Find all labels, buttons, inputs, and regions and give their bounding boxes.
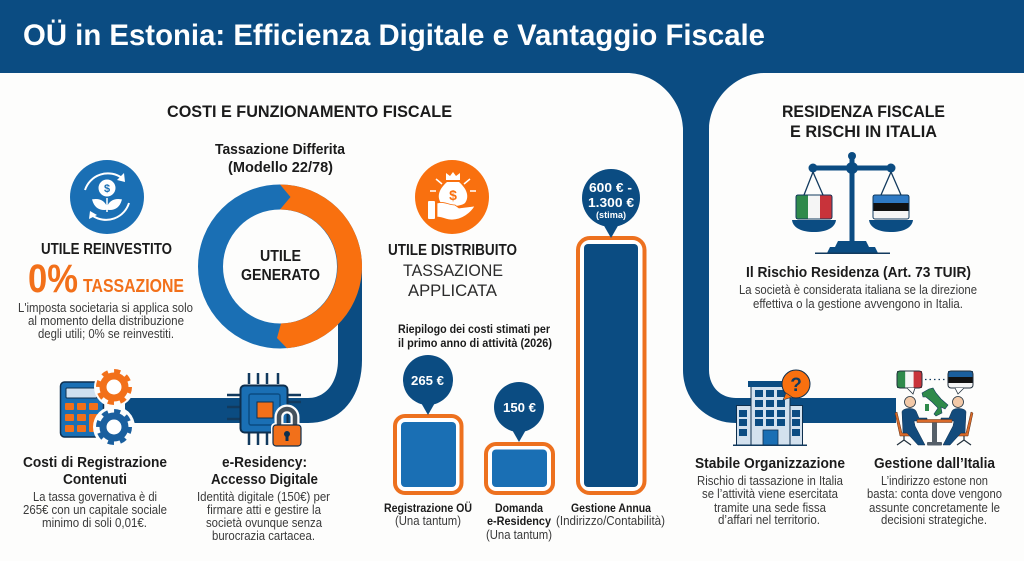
bar: domanda e-residency: e-Residency <box>487 514 551 528</box>
donut title: (Modello 22/78) <box>228 160 333 176</box>
bar: gestione annua: Gestione Annua <box>571 501 651 515</box>
text block: costi di registrazione <box>23 455 167 530</box>
text block: gestione dall'italia <box>867 456 1002 527</box>
donut blue segment <box>210 197 350 336</box>
text block: e-residency: Identità digitale (150€) per <box>197 490 330 504</box>
bar: registrazione OÜ: Registrazione OÜ <box>384 500 472 515</box>
text block: costi di registrazione: minimo di soli 0,01€. <box>42 516 147 530</box>
bar chart caption: il primo anno di attività (2026) <box>398 336 552 350</box>
icon: meeting between Italy and Estonia <box>895 371 973 446</box>
bar: domanda e-residency: (Una tantum) <box>486 528 552 542</box>
donut title <box>215 142 346 176</box>
text block: il rischio residenza: effettiva o la gestione avvengono in Italia. <box>753 297 963 311</box>
text block: costi di registrazione: Contenuti <box>63 472 127 488</box>
text block: gestione dall'italia: L’indirizzo estone non <box>881 474 988 488</box>
bar: gestione annua <box>556 169 665 528</box>
text block: costi di registrazione: La tassa governativa è di <box>33 490 157 504</box>
donut chart: tassazione differita <box>210 142 362 348</box>
text block: gestione dall'italia: Gestione dall’Italia <box>874 456 996 472</box>
text block: stabile organizzazione: Stabile Organizzazione <box>695 456 845 472</box>
text block: costi di registrazione: 265€ con un capitale sociale <box>23 503 167 517</box>
heading: residenza fiscale: RESIDENZA FISCALE <box>782 103 945 121</box>
donut centre label: UTILE <box>260 248 301 265</box>
text block: e-residency: società ovunque senza <box>206 516 322 530</box>
text block: stabile organizzazione: se l’attività viene esercitata <box>702 487 838 501</box>
bar chart caption <box>398 322 552 350</box>
estonian flag <box>873 195 909 219</box>
text block: e-residency <box>197 455 330 543</box>
donut orange segment <box>277 184 362 348</box>
donut centre label: GENERATO <box>241 267 320 284</box>
icon: reinvested profit: $ <box>104 183 110 195</box>
speech bubble italy <box>897 371 922 394</box>
bar chart: estimated costs <box>384 169 665 542</box>
title: OÜ in Estonia: Efficienza Digitale e Vantaggio Fiscale <box>23 19 765 52</box>
text block: utile reinvestito: 0% <box>28 257 78 301</box>
icon: scales with flags <box>792 152 913 254</box>
text block: stabile organizzazione <box>695 456 845 527</box>
text block: gestione dall'italia: basta: conta dove vengono <box>867 487 1002 501</box>
icon: office building with question mark <box>733 370 810 446</box>
header band with central connector pipe <box>0 0 1024 423</box>
text block: utile distribuito: APPLICATA <box>408 281 498 300</box>
heading: costi e funzionamento fiscale: COSTI E FUNZIONAMENTO FISCALE <box>167 103 452 121</box>
text block: utile reinvestito: L'imposta societaria si applica solo <box>18 301 193 315</box>
text block: e-residency: Accesso Digitale <box>211 472 318 488</box>
bar: gestione annua: (stima) <box>596 210 626 221</box>
text block: il rischio residenza <box>739 265 977 311</box>
icon: distributed profit <box>415 160 489 234</box>
bar: registrazione OÜ <box>384 355 472 528</box>
text block: stabile organizzazione: tramite una sede fissa <box>714 501 826 515</box>
icon: distributed profit: $ <box>449 187 457 203</box>
text block: e-residency: firmare atti e gestire la <box>207 503 321 517</box>
text block: utile reinvestito <box>18 241 193 341</box>
bar: domanda e-residency <box>486 382 553 542</box>
italian flag <box>796 195 832 219</box>
bar: gestione annua: 1.300 € <box>588 195 634 210</box>
text block: stabile organizzazione: d’affari nel territorio. <box>718 513 820 527</box>
heading: residenza fiscale <box>782 103 945 141</box>
text block: utile distribuito: UTILE DISTRIBUITO <box>388 242 517 259</box>
text block: utile reinvestito: UTILE REINVESTITO <box>41 241 172 258</box>
left connector pipe <box>125 270 362 423</box>
text block: utile distribuito: TASSAZIONE <box>403 261 503 280</box>
bar: domanda e-residency: 150 € <box>503 400 536 415</box>
heading: residenza fiscale: E RISCHI IN ITALIA <box>790 123 937 141</box>
text block: e-residency: e-Residency: <box>222 455 307 471</box>
text block: utile distribuito <box>388 242 517 300</box>
icon: reinvested profit <box>70 160 144 234</box>
text block: gestione dall'italia: assunte concretamente le <box>869 501 1000 515</box>
text block: utile reinvestito: TASSAZIONE <box>83 276 184 296</box>
text block: costi di registrazione: Costi di Registrazione <box>23 455 167 471</box>
bar: domanda e-residency: Domanda <box>495 501 543 515</box>
text block: il rischio residenza: Il Rischio Residenza (Art. 73 TUIR) <box>746 265 971 281</box>
bar: gestione annua: 600 € - <box>589 180 632 195</box>
text block: stabile organizzazione: Rischio di tassazione in Italia <box>697 474 843 488</box>
bar: registrazione OÜ: 265 € <box>411 373 444 388</box>
bar chart caption: Riepilogo dei costi stimati per <box>398 322 550 336</box>
text block: utile reinvestito: al momento della distribuzione <box>28 314 184 328</box>
speech bubble estonia <box>948 371 973 394</box>
icon: office building with question mark: ? <box>790 375 802 396</box>
bar: gestione annua: (Indirizzo/Contabilità) <box>556 514 665 528</box>
icon: chip with padlock <box>227 373 303 448</box>
text block: gestione dall'italia: decisioni strategiche. <box>881 513 987 527</box>
text block: e-residency: burocrazia cartacea. <box>212 529 315 543</box>
donut centre label <box>241 248 320 284</box>
text block: utile reinvestito: degli utili; 0% se reinvestiti. <box>38 327 174 341</box>
donut title: Tassazione Differita <box>215 142 346 158</box>
icon: calculator and gears <box>60 367 135 448</box>
text block: il rischio residenza: La società è considerata italiana se la direzione <box>739 283 977 297</box>
bar: registrazione OÜ: (Una tantum) <box>395 514 461 528</box>
